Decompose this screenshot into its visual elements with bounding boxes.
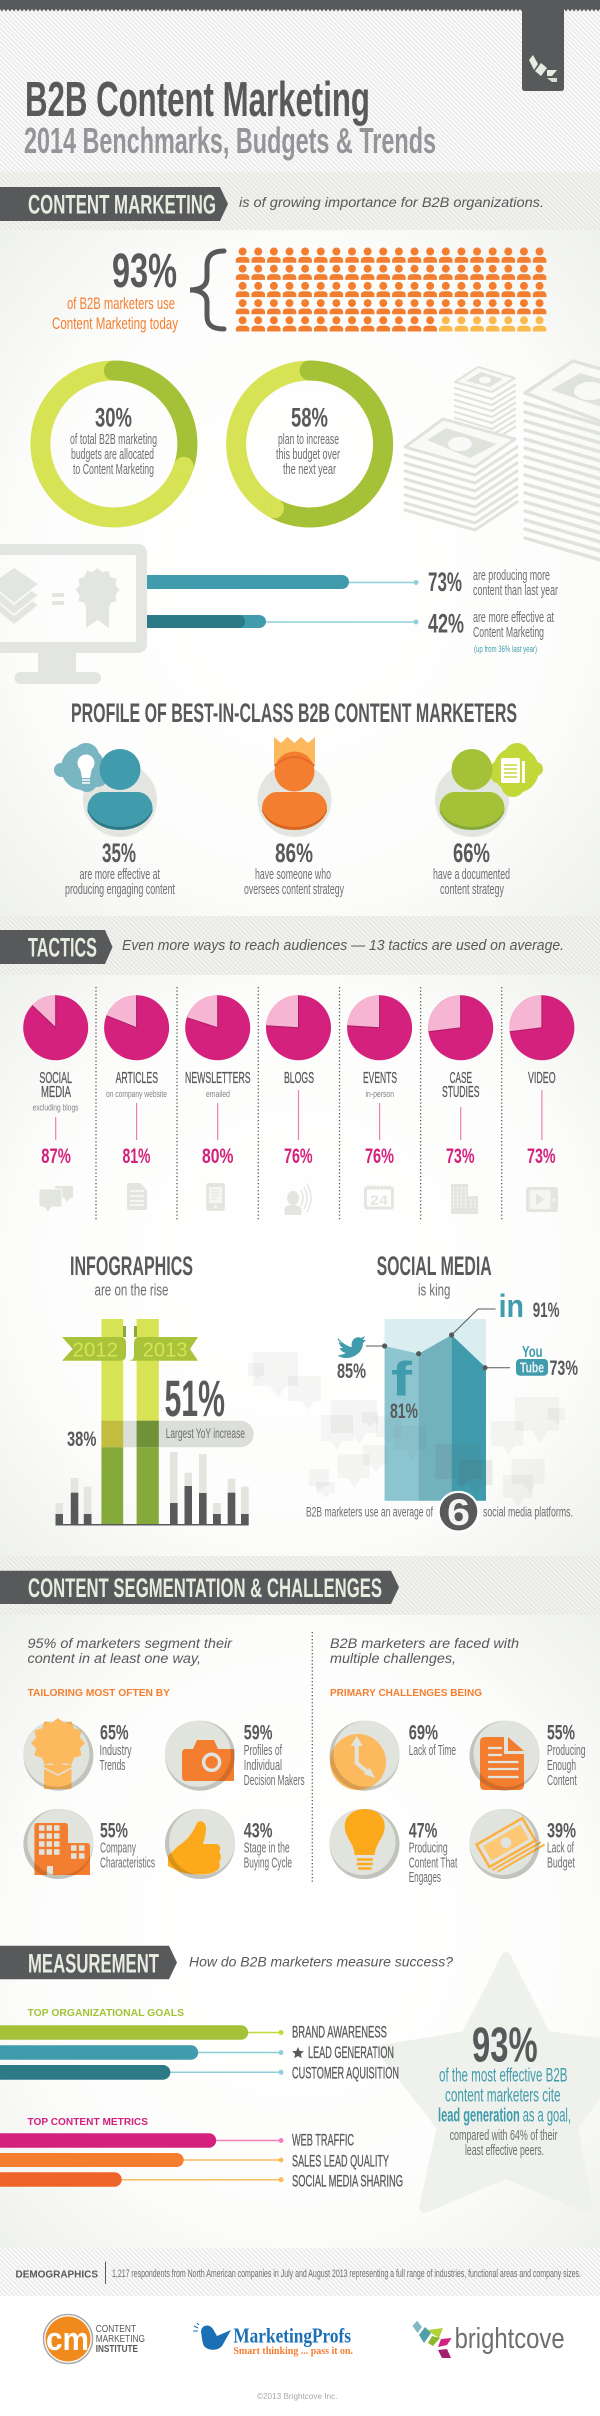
ribbon 2012: 2012 (73, 1340, 118, 1362)
item: engaging content bulb: Producing (409, 1840, 448, 1856)
chart: infographics bars: Largest YoY increase (166, 1426, 245, 1441)
stat: 93 percent use content marketing: Content Marketing today (52, 314, 178, 333)
ribbon 2013 (128, 1326, 198, 1362)
intro: challenges (330, 1636, 519, 1699)
logo: brightcove: brightcove (455, 2323, 565, 2355)
item: company building: Company (100, 1840, 136, 1856)
tactic: blogs 76 percent: 76% (284, 1145, 313, 1168)
logo: content marketing institute: MARKETING (96, 2334, 145, 2345)
chart: top content metrics: SOCIAL MEDIA SHARING (292, 2173, 403, 2191)
stat: 35 percent: producing engaging content (65, 882, 175, 898)
item: profiles camera: 59% (244, 1721, 273, 1744)
tactic: articles 81 percent: 81% (122, 1145, 151, 1168)
star backdrop (382, 1957, 600, 2208)
item: profiles camera (165, 1721, 305, 1791)
stat: 86 percent: oversees content strategy (244, 882, 344, 898)
section header: measurement (0, 1946, 453, 1979)
donut: 58 percent increase budget: 58% (291, 402, 328, 432)
item: lack of budget money: Budget (547, 1855, 575, 1871)
item: lack of time clock: Lack of Time (409, 1743, 456, 1759)
tactic: video 73 percent: VIDEO (528, 1070, 556, 1087)
demographics band (0, 2248, 600, 2296)
dotted column dividers (96, 987, 502, 1220)
top band and logo tab (0, 0, 600, 91)
logo: brightcove (412, 2321, 565, 2358)
tactic: blogs 76 percent (266, 995, 331, 1215)
tactic: articles 81 percent: ARTICLES (116, 1070, 158, 1087)
chart: top content metrics: TOP CONTENT METRICS (28, 2117, 148, 2128)
donut: 30 percent of budgets: 30% (95, 402, 132, 432)
section header: tactics: TACTICS (28, 932, 97, 962)
people grid: 93 of 100 (236, 248, 546, 332)
icon: facebook f: f (391, 1354, 413, 1406)
item: company building: Characteristics (100, 1855, 155, 1871)
profile: green person with document cloud (435, 743, 543, 837)
intro: segmentation: 95% of marketers segment their (28, 1636, 233, 1651)
chart: social media area: 6 (447, 1492, 470, 1533)
tactic: case studies 73 percent (428, 995, 493, 1214)
section header: content marketing (0, 172, 600, 230)
tactic: case studies 73 percent: 73% (446, 1145, 475, 1168)
item: buying cycle thumb: Buying Cycle (244, 1855, 292, 1871)
logo: marketingprofs: Smart thinking ... pass it on. (233, 2346, 353, 2357)
logo: content marketing institute: cm (46, 2321, 89, 2357)
bar: 73 percent producing more content (147, 567, 558, 599)
bar: 73 percent producing more content: 73% (428, 567, 462, 597)
item: lack of budget money (470, 1809, 576, 1879)
tactic: newsletters 80 percent (185, 995, 251, 1211)
chart: top organizational goals: LEAD GENERATION (308, 2044, 394, 2062)
chart: infographics bars (56, 1319, 254, 1526)
icon: youtube: Tube (520, 1360, 544, 1376)
icon: youtube: You (522, 1344, 543, 1361)
ribbon 2012 (62, 1326, 126, 1362)
stat: 86 percent: have someone who (255, 867, 331, 883)
item: industry trends badge: Industry (100, 1743, 132, 1759)
stat: 66 percent: have a documented (433, 867, 510, 883)
profile: teal person with idea cloud (54, 743, 157, 837)
item: lack of budget money: Lack of (547, 1840, 575, 1856)
stat: 86 percent: 86% (275, 838, 313, 868)
callout: 93 percent cite lead generation: least effective peers. (465, 2143, 544, 2159)
chart: social media area: 81% (390, 1400, 418, 1423)
chart: social media area: 85% (337, 1360, 366, 1383)
icon: twitter bird (338, 1336, 366, 1358)
tactic: articles 81 percent (104, 995, 169, 1210)
tactic: case studies 73 percent: CASE (450, 1070, 472, 1087)
tactic: social media 87 percent: MEDIA (41, 1084, 71, 1101)
stat: 35 percent (65, 838, 175, 898)
copyright: ©2013 Brightcove Inc. (257, 2391, 338, 2401)
bar: 42 percent more effective: Content Marketing (473, 625, 544, 641)
background: tactics section (0, 975, 600, 1556)
donut: 30 percent of budgets: of total B2B marketing (70, 432, 157, 448)
item: profiles camera: Individual (244, 1758, 282, 1774)
intro: segmentation: content in at least one way, (28, 1651, 201, 1666)
chat bubbles (248, 1352, 565, 1508)
intro: challenges: PRIMARY CHALLENGES BEING (330, 1688, 482, 1699)
demographics band: DEMOGRAPHICS (16, 2270, 98, 2281)
item: engaging content bulb (330, 1809, 457, 1886)
chart: infographics bars: 38% (67, 1428, 97, 1451)
tactic: articles 81 percent: on company website (106, 1089, 167, 1100)
tactic: newsletters 80 percent: 80% (202, 1145, 234, 1168)
bar: 42 percent more effective: 42% (428, 608, 464, 638)
item: producing enough content document (470, 1721, 586, 1791)
callout: 93 percent cite lead generation (438, 2019, 571, 2159)
heading: infographics on the rise (70, 1251, 193, 1300)
bar: 42 percent more effective: (up from 36% last year) (474, 644, 537, 654)
background: section one (0, 230, 600, 916)
donut: 30 percent of budgets: to Content Marketing (73, 462, 154, 478)
callout: 93 percent cite lead generation: 93% (472, 2019, 538, 2073)
title: B2B Content Marketing (25, 73, 370, 127)
item: lack of budget money: 39% (547, 1819, 576, 1842)
item: company building: 55% (100, 1819, 128, 1842)
title (24, 73, 436, 161)
tactic: events 76 percent: 76% (365, 1145, 394, 1168)
item: lack of time clock (330, 1721, 456, 1791)
chart: top content metrics: SALES LEAD QUALITY (292, 2152, 389, 2170)
donut: 58 percent increase budget: the next year (283, 462, 336, 478)
donut: 30 percent of budgets (40, 370, 194, 518)
profile: orange person with crown (258, 737, 332, 837)
tactic: blogs 76 percent: BLOGS (284, 1070, 314, 1087)
item: engaging content bulb: Engages (409, 1870, 441, 1886)
heading: social media is king: SOCIAL MEDIA (377, 1251, 492, 1281)
stat: 93 percent use content marketing (52, 245, 178, 333)
tactic: events 76 percent: in-person (366, 1089, 394, 1100)
intro: challenges: B2B marketers are faced with (330, 1636, 519, 1651)
item: profiles camera: Decision Makers (244, 1773, 305, 1789)
logo: marketingprofs: MarketingProfs (233, 2324, 351, 2348)
logo: marketingprofs (193, 2323, 353, 2357)
stat: 93 percent use content marketing: 93% (112, 245, 177, 298)
donut: 58 percent increase budget (236, 370, 383, 518)
ribbon 2013: 2013 (143, 1340, 188, 1362)
donut: 58 percent increase budget: this budget over (276, 447, 340, 463)
icon: monitor with stack equals badge (0, 544, 147, 684)
tactic: case studies 73 percent: STUDIES (442, 1084, 480, 1101)
item: engaging content bulb: 47% (409, 1819, 438, 1842)
tactic: events 76 percent: 24 (370, 1192, 388, 1208)
section header: content segmentation and challenges: CONTENT SEGMENTATION & CHALLENGES (28, 1573, 382, 1603)
item: industry trends badge: 65% (100, 1721, 129, 1744)
tactic: events 76 percent (347, 995, 412, 1208)
section header: content marketing: is of growing importance for B2B organizations. (239, 195, 544, 210)
section header: tactics: Even more ways to reach audiences — 13 tactics are used on average. (122, 937, 564, 954)
section header: measurement: MEASUREMENT (28, 1948, 159, 1978)
logo: content marketing institute (44, 2314, 145, 2364)
tactic: social media 87 percent: excluding blogs (32, 1102, 79, 1114)
tactic: newsletters 80 percent: emailed (206, 1089, 230, 1100)
callout: 93 percent cite lead generation: lead generation (438, 2106, 520, 2127)
chart: social media area: 73% (550, 1357, 578, 1380)
logo: content marketing institute: CONTENT (96, 2324, 136, 2335)
brace (190, 251, 224, 329)
tactic: events 76 percent: EVENTS (363, 1070, 397, 1087)
tactic: video 73 percent: 73% (527, 1145, 556, 1168)
background: header stripes (0, 0, 600, 172)
item: industry trends badge: Trends (100, 1758, 126, 1774)
chart: top organizational goals: CUSTOMER AQUISITION (292, 2065, 399, 2083)
item: industry trends badge (23, 1718, 132, 1791)
background: footer (0, 2296, 600, 2416)
icon: linkedin: in (499, 1288, 524, 1324)
section header: tactics (0, 916, 600, 975)
tactic: social media 87 percent: SOCIAL (39, 1070, 72, 1087)
stat: 93 percent use content marketing: of B2B marketers use (67, 294, 175, 313)
heading: social media is king (377, 1251, 492, 1300)
tactic: video 73 percent (509, 995, 574, 1212)
heading: infographics on the rise: INFOGRAPHICS (70, 1251, 193, 1281)
item: buying cycle thumb: 43% (244, 1819, 273, 1842)
tactic: newsletters 80 percent: NEWSLETTERS (185, 1070, 251, 1087)
icon: money stacks (405, 361, 600, 567)
stat: 86 percent (244, 838, 344, 898)
section header: measurement: How do B2B marketers measure success? (189, 1954, 453, 1970)
item: buying cycle thumb: Stage in the (244, 1840, 290, 1856)
bar: 73 percent producing more content: are producing more (473, 568, 550, 584)
heading: social media is king: is king (418, 1282, 450, 1300)
section header: content segmentation and challenges (0, 1556, 600, 1615)
chart: social media area (248, 1288, 578, 1533)
intro: segmentation: TAILORING MOST OFTEN BY (28, 1688, 170, 1699)
chart: social media area: B2B marketers use an average of (306, 1504, 433, 1520)
chart: top content metrics: WEB TRAFFIC (292, 2132, 354, 2150)
chart: top organizational goals (0, 2008, 399, 2083)
icon: youtube (516, 1344, 548, 1376)
item: lack of time clock: 69% (409, 1721, 438, 1744)
item: producing enough content document: Enough (547, 1758, 576, 1774)
item: company building (23, 1809, 155, 1879)
heading: infographics on the rise: are on the rise (94, 1282, 168, 1300)
logo: content marketing institute: INSTITUTE (96, 2344, 138, 2355)
intro: segmentation (28, 1636, 233, 1699)
stat: 66 percent: 66% (453, 838, 490, 868)
donut: 58 percent increase budget: plan to increase (278, 432, 339, 448)
item: buying cycle thumb (165, 1809, 292, 1879)
item: profiles camera: Profiles of (244, 1743, 283, 1759)
stat: 35 percent: are more effective at (80, 867, 160, 883)
section header: content marketing: CONTENT MARKETING (28, 190, 216, 220)
chart: top organizational goals: TOP ORGANIZATIONAL GOALS (28, 2008, 184, 2019)
intro: challenges: multiple challenges, (330, 1651, 456, 1666)
stat: 66 percent (433, 838, 510, 898)
donut: 30 percent of budgets: budgets are allocated (71, 447, 154, 463)
stat: 66 percent: content strategy (440, 882, 504, 898)
tactic: social media 87 percent (23, 995, 88, 1212)
chart: top organizational goals: BRAND AWARENESS (292, 2024, 387, 2042)
stat: 35 percent: 35% (102, 838, 136, 868)
bar: 42 percent more effective (147, 608, 554, 654)
chart: social media area: 91% (533, 1299, 560, 1322)
chart: top content metrics (0, 2117, 403, 2191)
chart: infographics bars: 51% (164, 1370, 225, 1427)
item: producing enough content document: 55% (547, 1721, 575, 1744)
item: producing enough content document: Content (547, 1773, 577, 1789)
tactic: social media 87 percent: 87% (41, 1145, 71, 1168)
background: segmentation and measurement section (0, 1615, 600, 2248)
item: engaging content bulb: Content That (409, 1855, 457, 1871)
